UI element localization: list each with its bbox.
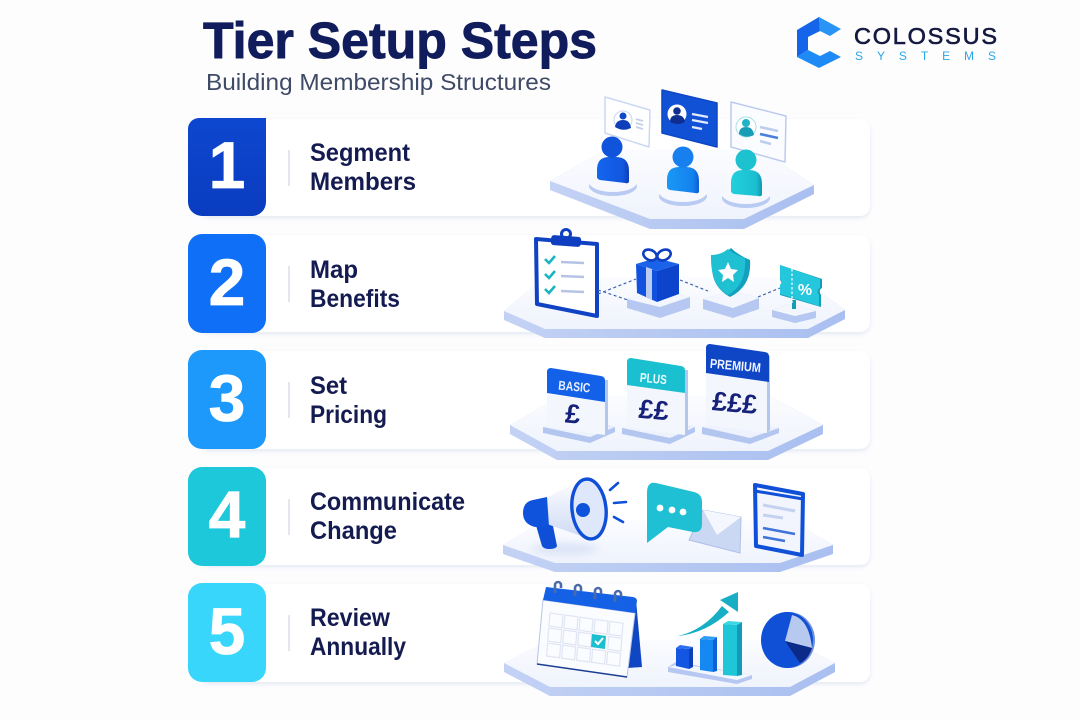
step 2 panel: map benefits xyxy=(188,230,870,338)
tier card: basic: £ xyxy=(564,398,582,430)
gift xyxy=(627,248,690,318)
person 2 xyxy=(659,146,707,206)
number tile 2: 2 xyxy=(209,245,245,319)
step 4 panel: communicate change xyxy=(188,467,870,572)
card xyxy=(200,584,870,682)
megaphone xyxy=(523,477,626,555)
person 3 xyxy=(722,150,770,208)
card xyxy=(200,119,870,216)
label: Review xyxy=(310,604,391,632)
icon: hexagonal C mark xyxy=(797,17,841,68)
calendar xyxy=(537,582,642,677)
profile card right xyxy=(731,102,786,162)
logo tagline: SYSTEMS xyxy=(855,49,996,63)
logo wordmark: COLOSSUS xyxy=(854,23,997,49)
dashed connectors xyxy=(598,279,780,300)
label xyxy=(310,488,465,545)
coupon xyxy=(772,265,822,323)
number tile 2 xyxy=(188,234,266,333)
label: Members xyxy=(310,168,416,196)
label xyxy=(310,256,400,313)
number tile 1: 1 xyxy=(209,128,245,202)
card xyxy=(200,468,870,565)
binder rings xyxy=(555,582,621,602)
card xyxy=(200,351,870,449)
speech bubble xyxy=(647,483,702,543)
step 3 panel: set pricing xyxy=(188,344,870,460)
bar chart with trend arrow xyxy=(668,592,752,684)
label xyxy=(310,139,416,196)
pie chart xyxy=(761,612,815,668)
number tile 1 xyxy=(188,118,266,216)
shield xyxy=(703,248,759,318)
illustration: benefits map on platform xyxy=(504,230,845,338)
clipboard xyxy=(536,230,597,316)
document tablet xyxy=(755,485,803,555)
profile card left xyxy=(605,97,650,147)
envelope xyxy=(689,510,741,553)
illustration: annual review on platform xyxy=(504,582,835,696)
illustration: pricing tiers on platform xyxy=(510,344,823,460)
tier card: plus xyxy=(622,358,695,444)
label xyxy=(310,604,406,661)
tier card: basic xyxy=(543,368,615,443)
number tile 3 xyxy=(188,350,266,449)
step 1 panel: segment members xyxy=(188,90,870,229)
tier card: plus: ££ xyxy=(638,394,670,426)
label: Set xyxy=(310,372,348,400)
illustration: member profiles on platform xyxy=(550,90,814,229)
profile card middle xyxy=(662,90,717,147)
label: Pricing xyxy=(310,401,387,429)
title: Tier Setup Steps xyxy=(203,12,597,69)
coupon: % xyxy=(798,282,812,299)
label: Benefits xyxy=(310,285,400,313)
subtitle: Building Membership Structures xyxy=(206,69,551,95)
number tile 4 xyxy=(188,467,266,566)
number tile 3: 3 xyxy=(209,361,245,435)
checked date xyxy=(591,634,606,649)
tier card: premium: £££ xyxy=(711,386,759,420)
illustration: communication on platform xyxy=(503,477,833,572)
tier card: basic: BASIC xyxy=(558,378,591,395)
label: Communicate xyxy=(310,488,465,516)
label: Change xyxy=(310,517,397,545)
number tile 5: 5 xyxy=(209,594,245,668)
tier card: plus: PLUS xyxy=(639,370,668,387)
person 1 xyxy=(589,136,637,196)
card xyxy=(200,235,870,332)
tier card: premium: PREMIUM xyxy=(709,356,761,375)
label: Segment xyxy=(310,139,411,167)
tier card: premium xyxy=(702,344,779,444)
logo: Colossus Systems xyxy=(797,17,997,68)
label: Annually xyxy=(310,633,406,661)
step 5 panel: review annually xyxy=(188,582,870,696)
number tile 4: 4 xyxy=(209,477,246,551)
label: Map xyxy=(310,256,358,284)
number tile 5 xyxy=(188,583,266,682)
label xyxy=(310,372,387,429)
